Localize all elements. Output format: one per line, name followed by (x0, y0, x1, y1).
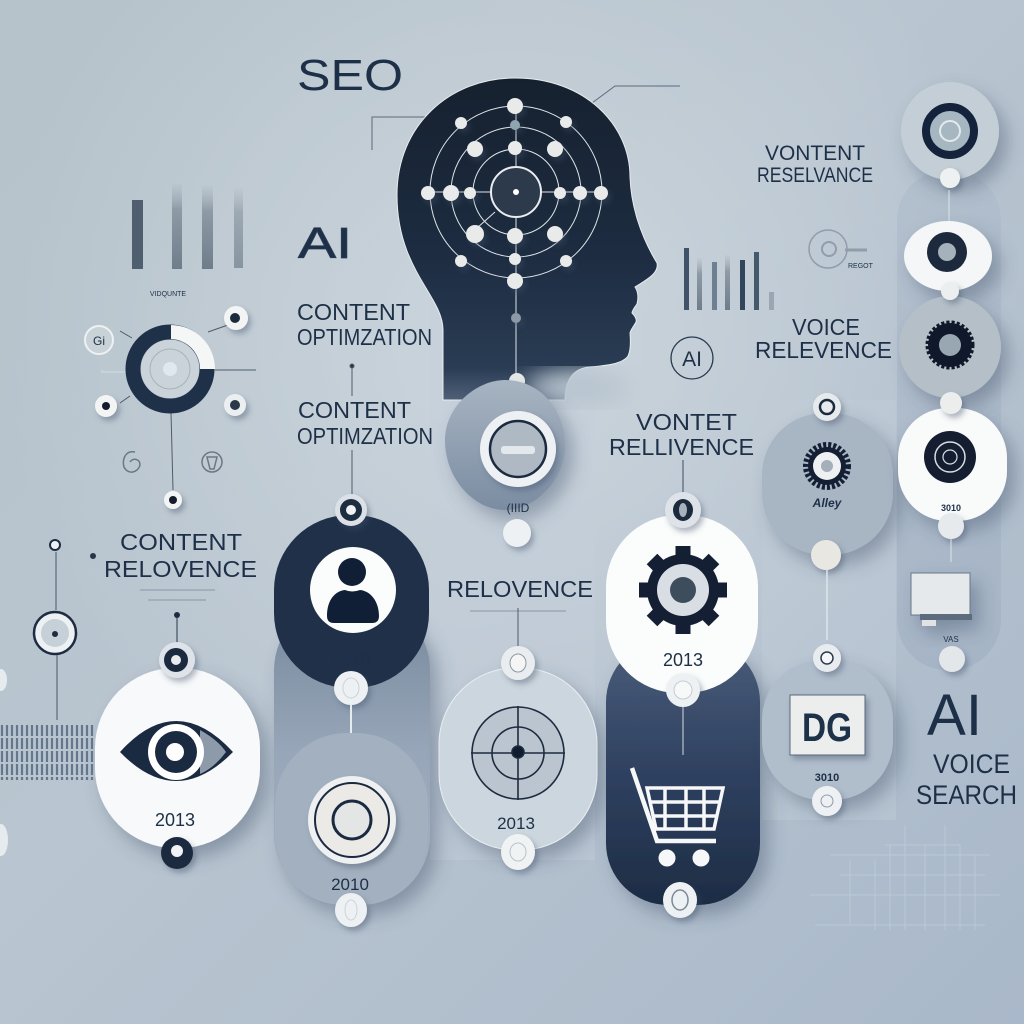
head connector lines (372, 86, 680, 150)
text: voice relevence: RELEVENCE (755, 337, 892, 363)
white card (606, 515, 758, 693)
icon: AI circle: AI (682, 348, 702, 371)
text: vontent relevance: RESELVANCE (757, 164, 873, 187)
icon: spiky disc (899, 296, 1001, 398)
network nodes (421, 98, 608, 389)
connector (950, 538, 952, 562)
panel: spiky gear (762, 393, 893, 570)
connector node (503, 519, 531, 547)
top node (501, 646, 535, 680)
faded gauge icon (809, 230, 874, 270)
icon: frame: DG (802, 706, 852, 750)
striped pattern (2, 725, 92, 780)
bar chart: left: VIDQUNTE (150, 291, 186, 298)
small ring marker and stem (34, 540, 180, 720)
bottom node (812, 786, 842, 816)
icon: cart (632, 768, 723, 866)
heading: SEO: SEO (297, 51, 403, 100)
bar chart: left (132, 184, 243, 298)
text: content optimization lower (297, 397, 433, 449)
network centre (491, 167, 541, 217)
text: vontet rellivence: RELLIVENCE (609, 434, 754, 460)
donut chart with satellite nodes: Gi (93, 334, 105, 348)
panel: target (439, 646, 597, 870)
connector (350, 364, 354, 495)
text: voice relevence (755, 314, 892, 363)
bottom node (663, 882, 697, 918)
top node (813, 393, 841, 421)
icon: rings (308, 776, 396, 864)
top node (159, 642, 195, 678)
year: 2013 (155, 810, 195, 830)
icon: ring disc (901, 82, 999, 188)
grey card (275, 733, 428, 905)
text: content optimization upper (297, 299, 432, 350)
faded gauge icon: REGOT (848, 263, 874, 270)
nodes (938, 392, 964, 539)
jaw fade (526, 370, 630, 406)
year: 2010 (332, 650, 370, 669)
swirl icons (123, 452, 222, 472)
silhouette (397, 78, 657, 400)
dark person card (274, 515, 429, 688)
connector (682, 460, 684, 500)
faint grid bottom right (810, 825, 1000, 930)
connector (517, 608, 519, 650)
icon: eye disc (904, 221, 992, 291)
small marker near text (90, 553, 96, 559)
panel: central lens (445, 380, 565, 547)
text: relovence: RELOVENCE (447, 576, 593, 602)
outline icon node (85, 326, 113, 354)
heading: AI left: AI (298, 219, 352, 268)
text: content optimization upper: CONTENT (297, 299, 410, 325)
text: content optimization lower: OPTIMZATION (297, 423, 433, 449)
top node (813, 644, 841, 672)
icon: eye (120, 721, 233, 781)
icon: monitor (911, 573, 972, 626)
icon: spiky gear (806, 445, 848, 487)
caption: Alley (812, 496, 843, 510)
bottom node (335, 893, 367, 927)
caption and node: VAS (943, 635, 959, 644)
text: AI voice search: VOICE (933, 749, 1010, 779)
node (941, 282, 959, 300)
panel: gear and cart column (606, 492, 760, 918)
icon: AI circle (671, 337, 713, 379)
icon: lens (480, 411, 556, 487)
panel: picture frame (762, 644, 893, 816)
caption and node (939, 635, 965, 672)
icon: gear (639, 546, 727, 634)
donut chart with satellite nodes (85, 306, 256, 509)
text: content relevance: RELOVENCE (104, 556, 257, 582)
small nodes (95, 306, 248, 509)
text: AI voice search: AI (927, 683, 982, 748)
network rings and spokes (429, 104, 605, 375)
year: 2013 (497, 814, 535, 833)
top node (665, 492, 701, 528)
year: 3010 (815, 772, 839, 784)
column backdrops (430, 170, 1001, 860)
text: vontet rellivence (609, 409, 754, 460)
text: content optimization upper: OPTIMZATION (297, 324, 432, 350)
year: 2013 (663, 650, 703, 670)
garbled label: (IIID (507, 501, 530, 515)
icon: target (471, 706, 565, 800)
icon: person (310, 547, 396, 633)
text: content relevance (104, 529, 257, 582)
text: voice relevence: VOICE (792, 314, 860, 340)
panel: person and rings column (274, 494, 430, 927)
bar chart: middle (684, 248, 774, 310)
text: content relevance: CONTENT (120, 529, 242, 555)
icon: spiral card: 3010 (941, 503, 961, 513)
connector (948, 190, 950, 222)
text: content optimization lower: CONTENT (298, 397, 411, 423)
text: vontent relevance: VONTENT (765, 142, 865, 165)
node (666, 673, 700, 707)
connector (826, 570, 828, 640)
small AI label: AI (945, 96, 953, 106)
top node (335, 494, 367, 526)
faint rules under text (140, 590, 566, 611)
text: vontet rellivence: VONTET (636, 409, 737, 435)
bottom node (501, 834, 535, 870)
bottom node (811, 540, 841, 570)
node (334, 671, 368, 705)
icon: spiral card (898, 408, 1007, 521)
head silhouette with neural network (397, 78, 657, 406)
bottom node (161, 837, 193, 869)
icon: frame (790, 695, 865, 755)
left edge fragments (0, 669, 8, 856)
text: AI voice search (916, 683, 1017, 810)
text: vontent relevance (757, 142, 873, 187)
right column icons (898, 82, 1007, 672)
panel: eye (95, 642, 260, 869)
year: 2010 (331, 875, 369, 894)
donut (133, 332, 207, 406)
